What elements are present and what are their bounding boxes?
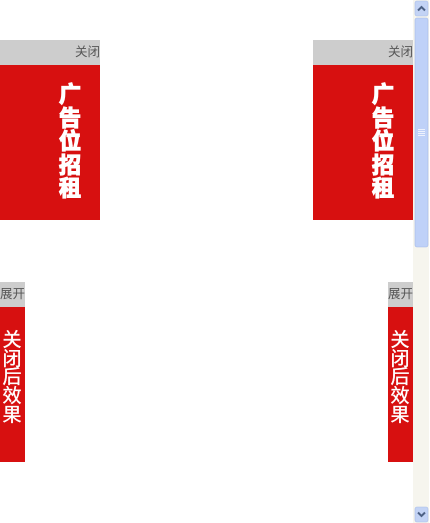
expand bar [0, 282, 25, 307]
scrollbar [413, 0, 429, 523]
expand bar: 展开 [0, 287, 25, 301]
panel: collapsed left ad [0, 282, 25, 462]
close bar [313, 40, 413, 65]
collapsed text: 关闭后效果 [2, 330, 22, 426]
panel: top left ad [0, 40, 100, 220]
ad text: 广告位招租 [59, 82, 81, 201]
collapsed text: 关闭后效果 [390, 330, 410, 426]
panel: top right ad [313, 40, 413, 220]
collapsed banner [388, 307, 413, 462]
expand bar [388, 282, 413, 307]
ad banner [313, 65, 413, 220]
scroll thumb [415, 18, 428, 247]
scroll up button [415, 1, 428, 16]
close bar [0, 40, 100, 65]
collapsed banner [0, 307, 25, 462]
close bar: 关闭 [75, 45, 100, 59]
scroll down button [415, 507, 428, 522]
close bar: 关闭 [388, 45, 413, 59]
ad banner [0, 65, 100, 220]
expand bar: 展开 [388, 287, 413, 301]
panel: collapsed right ad [388, 282, 413, 462]
ad text: 广告位招租 [372, 82, 394, 201]
